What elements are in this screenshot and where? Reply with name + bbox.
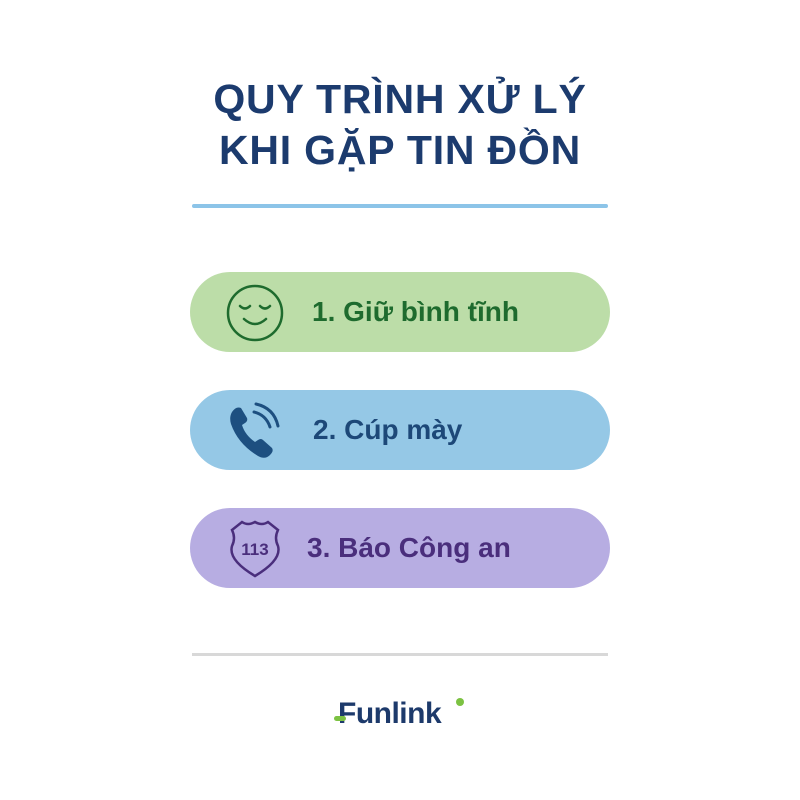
title: QUY TRÌNH XỬ LÝ — [213, 76, 587, 122]
text: 2. Cúp mày — [313, 414, 462, 445]
step 1: keep calm — [190, 272, 610, 352]
icon: phone — [230, 402, 280, 458]
title — [213, 76, 587, 173]
step 2: hang up — [190, 390, 610, 470]
title: KHI GẶP TIN ĐỒN — [219, 127, 581, 173]
text: 3. Báo Công an — [307, 532, 511, 563]
logo: Funlink: Funlink — [338, 697, 441, 730]
text: 1. Giữ bình tĩnh — [312, 296, 519, 327]
icon: 113 shield — [230, 520, 280, 578]
icon: calm face — [226, 284, 284, 342]
step 3: report police — [190, 508, 610, 588]
icon: 113 shield: 113 — [241, 540, 269, 559]
